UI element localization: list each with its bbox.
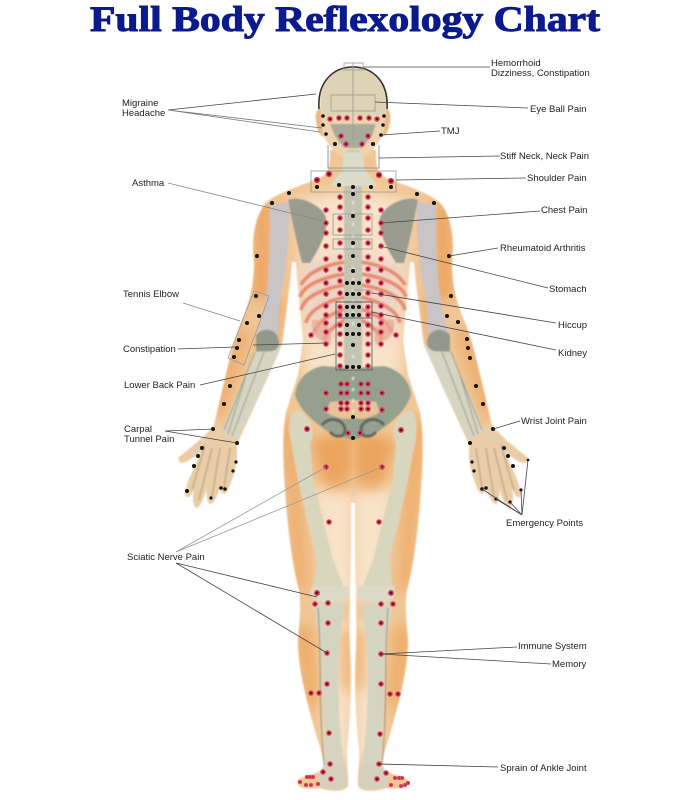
labels: Sprain of Ankle Joint <box>500 763 587 774</box>
marker boxes and centre line <box>228 63 396 370</box>
dark skull arc <box>319 67 387 109</box>
title: Full Body Reflexology Chart <box>90 0 600 39</box>
labels: Constipation <box>123 344 176 355</box>
skin and skeleton <box>172 67 534 791</box>
labels: Stiff Neck, Neck Pain <box>500 151 589 162</box>
labels <box>122 58 590 774</box>
labels: Tennis Elbow <box>123 289 179 300</box>
labels: Memory <box>552 659 587 670</box>
leader lines <box>165 67 556 767</box>
labels: Rheumatoid Arthritis <box>500 243 586 254</box>
spine <box>344 150 362 370</box>
red reflex points <box>299 116 409 787</box>
labels: Hiccup <box>558 320 587 331</box>
labels: Migraine <box>122 98 158 109</box>
labels: Headache <box>122 108 165 119</box>
labels: Carpal <box>124 424 152 435</box>
labels: Wrist Joint Pain <box>521 416 587 427</box>
labels: Tunnel Pain <box>124 434 174 445</box>
labels: Chest Pain <box>541 205 587 216</box>
labels: Sciatic Nerve Pain <box>127 552 205 563</box>
labels: Stomach <box>549 284 586 295</box>
body illustration <box>172 63 534 791</box>
labels: Lower Back Pain <box>124 380 195 391</box>
labels: Dizziness, Constipation <box>491 68 590 79</box>
labels: TMJ <box>441 126 460 137</box>
labels: Kidney <box>558 348 587 359</box>
labels: Shoulder Pain <box>527 173 587 184</box>
labels: Immune System <box>518 641 587 652</box>
labels: Hemorrhoid <box>491 58 541 69</box>
labels: Eye Ball Pain <box>530 104 587 115</box>
labels: Asthma <box>132 178 165 189</box>
labels: Emergency Points <box>506 518 583 529</box>
black reflex points <box>185 114 529 504</box>
head <box>316 108 390 137</box>
